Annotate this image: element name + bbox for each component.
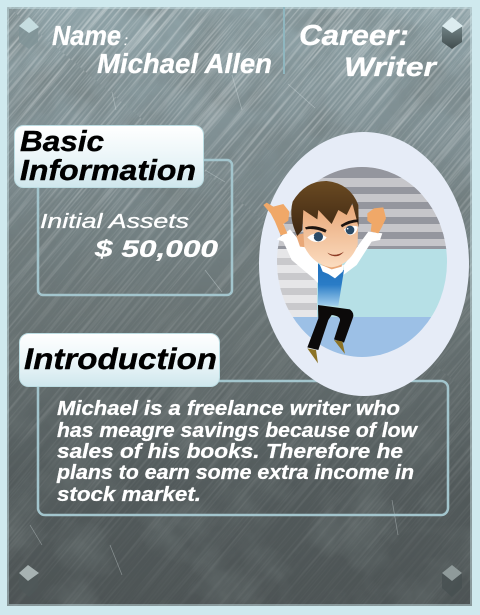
character shoes	[307, 340, 345, 363]
icon: stud top right	[442, 17, 463, 49]
heading: basic information: Basic	[20, 126, 104, 158]
character legs	[307, 305, 353, 350]
character collar	[320, 265, 344, 278]
heading: introduction	[20, 334, 220, 386]
introduction text: sales of his books. Therefore he	[57, 441, 403, 463]
portrait background	[277, 167, 447, 357]
career block: Writer	[344, 52, 438, 82]
character hair	[291, 181, 359, 236]
character vest	[318, 263, 344, 306]
character face	[302, 205, 358, 267]
introduction text: Michael is a freelance writer who	[57, 398, 400, 420]
character shirt arms	[277, 229, 382, 283]
icon: stud bottom left	[19, 565, 39, 597]
character hands	[263, 203, 386, 235]
introduction text: plans to earn some extra income in	[56, 462, 414, 484]
character neck and ear	[296, 233, 343, 269]
character brows and eyes	[305, 219, 358, 256]
header divider	[283, 7, 285, 74]
initial assets value: $ 50,000	[94, 236, 219, 263]
heading: introduction: Introduction	[24, 343, 217, 376]
icon: stud bottom right	[442, 565, 462, 597]
panel: introduction box	[38, 381, 448, 515]
character: jumping writer	[263, 181, 386, 363]
name block	[52, 20, 272, 79]
career block	[299, 20, 438, 82]
icon: stud top left	[19, 17, 39, 49]
introduction text: has meagre savings because of low	[57, 420, 419, 442]
heading: basic information	[14, 126, 204, 188]
name block: Michael Allen	[97, 48, 272, 79]
panel: basic information box	[38, 160, 232, 295]
career block: Career:	[299, 20, 409, 52]
initial assets label: Initial Assets	[40, 211, 189, 233]
name block: Name	[52, 20, 121, 51]
name block: :	[124, 32, 128, 48]
introduction text: stock market.	[57, 484, 201, 506]
portrait medallion	[259, 132, 469, 396]
introduction text	[56, 398, 419, 506]
heading: basic information: Information	[20, 155, 196, 187]
